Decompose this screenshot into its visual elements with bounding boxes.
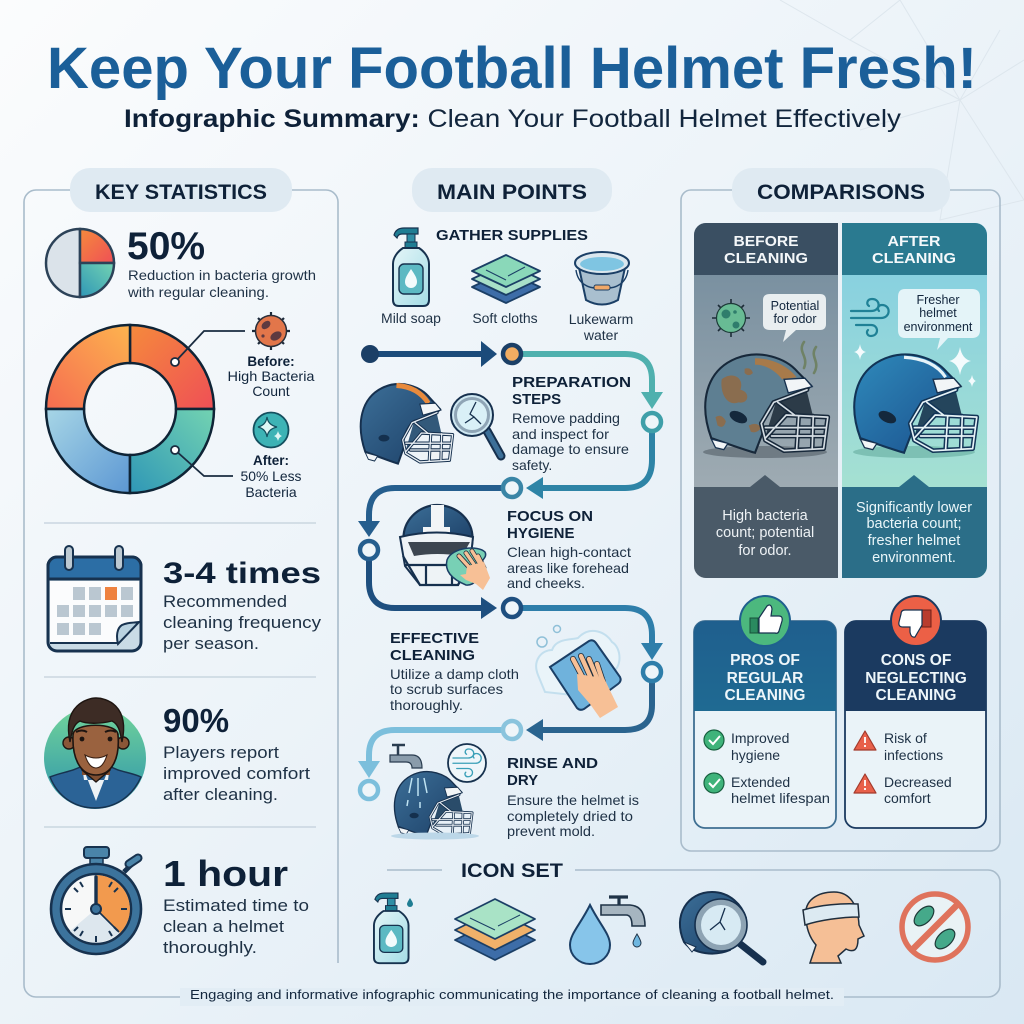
icon: clean helmet <box>853 354 977 458</box>
list: pros: Extended <box>731 774 790 790</box>
icon: soap bottle <box>374 893 413 963</box>
icon: helmet with magnifier <box>361 384 501 464</box>
speech bubble: fresher helmet environment <box>898 289 980 350</box>
stat: 1 hour: 1 hour <box>163 853 288 894</box>
text: preparation steps: safety. <box>512 457 552 473</box>
list: pros <box>704 730 830 806</box>
stat: 50%: 50% <box>127 225 205 268</box>
icon: odor waves <box>802 342 816 373</box>
icon: no bacteria <box>902 894 968 960</box>
text: effective cleaning: EFFECTIVE <box>390 630 479 647</box>
text: effective cleaning <box>390 630 519 713</box>
footer note <box>180 987 844 1006</box>
heading: pros: REGULAR <box>727 670 803 687</box>
title: Keep Your Football Helmet Fresh! <box>47 36 977 101</box>
icon: bacteria <box>252 312 290 350</box>
list: pros: hygiene <box>731 747 780 763</box>
heading: after cleaning: AFTER <box>888 233 941 250</box>
panel: before cleaning <box>694 223 838 578</box>
heading: cons: CONS OF <box>881 652 951 669</box>
list: cons: Decreased <box>884 774 952 790</box>
callout: before: Count <box>252 383 290 399</box>
icon: stopwatch <box>51 847 141 954</box>
heading: before cleaning <box>724 233 808 267</box>
text: rinse and dry: DRY <box>507 772 538 789</box>
list: cons: comfort <box>884 790 931 806</box>
callout: after: 50% Less <box>240 468 302 484</box>
donut chart <box>46 325 214 493</box>
footer note: Engaging and informative infographic communicating the importance of cleaning a football helmet. <box>190 987 834 1002</box>
heading: comparisons: COMPARISONS <box>757 180 925 204</box>
heading: icon set: ICON SET <box>461 861 563 882</box>
icon: fresh air <box>851 299 889 336</box>
text: before summary: count; potential <box>716 525 814 541</box>
callout: before: Before: <box>247 354 295 369</box>
list: cons <box>854 730 952 806</box>
heading: cons: CLEANING <box>876 687 956 704</box>
stat: 50%: Reduction in bacteria growth <box>128 267 316 283</box>
icon: sparkles <box>854 344 976 387</box>
text: before summary <box>716 508 814 559</box>
stat: 3-4 times: 3-4 times <box>163 557 321 590</box>
stat: 90%: 90% <box>163 702 229 739</box>
stat: 1 hour: clean a helmet <box>163 918 284 936</box>
speech bubble: potential for odor: Potential <box>771 299 819 313</box>
callout: after <box>240 453 302 500</box>
icon: germ <box>712 299 750 337</box>
text: after summary: fresher helmet <box>868 533 960 549</box>
text: focus on hygiene: FOCUS ON <box>507 508 593 525</box>
heading: after cleaning: CLEANING <box>872 250 956 267</box>
stat: 3-4 times: Recommended <box>163 593 287 611</box>
subtitle: Infographic Summary: Clean Your Football Helmet Effectively <box>124 105 902 133</box>
text: before summary: High bacteria <box>722 508 809 524</box>
text: after summary: Significantly lower <box>856 500 972 516</box>
list: cons: infections <box>884 747 943 763</box>
stat: 50% <box>127 225 316 300</box>
text: preparation steps: Remove padding <box>512 410 620 426</box>
icon: dirty helmet <box>703 354 828 458</box>
text: effective cleaning: thoroughly. <box>390 697 463 713</box>
callout: after: After: <box>253 453 289 468</box>
stat: 50%: with regular cleaning. <box>127 284 269 300</box>
label: lukewarm water: water <box>583 327 618 343</box>
list: pros: helmet lifespan <box>731 790 830 806</box>
icon: thumbs down <box>891 596 941 646</box>
text: effective cleaning: CLEANING <box>390 647 475 664</box>
flow nodes <box>360 345 661 799</box>
text: preparation steps: damage to ensure <box>512 441 629 457</box>
text: after summary: bacteria count; <box>866 516 962 532</box>
panel: after cleaning <box>842 223 987 578</box>
text: focus on hygiene: Clean high-contact <box>507 544 631 560</box>
text: effective cleaning: Utilize a damp cloth <box>390 666 519 682</box>
text: after summary: environment. <box>872 550 956 566</box>
icon: thumbs up <box>740 596 790 646</box>
icon: sparkle <box>254 412 288 448</box>
icon: helmet front with cloth and hand <box>400 505 490 590</box>
callout: before: High Bacteria <box>228 368 315 384</box>
text: preparation steps: PREPARATION <box>512 374 631 391</box>
icon: cloth stack <box>455 899 535 960</box>
heading: before cleaning: CLEANING <box>724 250 808 267</box>
icon: calendar <box>48 546 141 651</box>
stat: 90% <box>163 702 310 804</box>
icon: faucet, helmet and wind <box>390 744 486 840</box>
speech bubble: potential for odor: for odor <box>773 312 817 326</box>
text: preparation steps: STEPS <box>512 391 561 408</box>
callout leaders <box>171 331 245 476</box>
stat: 1 hour: thoroughly. <box>163 939 257 957</box>
stat: 3-4 times: per season. <box>163 635 259 653</box>
list: pros: Improved <box>731 730 789 746</box>
stat: 90%: improved comfort <box>163 765 310 783</box>
text: rinse and dry <box>507 755 639 839</box>
panel: pros of regular cleaning <box>694 596 836 828</box>
stat: 1 hour <box>163 853 309 957</box>
panel: key statistics <box>44 225 322 957</box>
heading: key statistics <box>70 168 292 212</box>
icon: small pie chart <box>46 229 114 297</box>
icon: helmet inspection <box>680 892 763 962</box>
text: after summary <box>856 500 972 566</box>
heading: pros <box>725 652 805 704</box>
flow arrowheads <box>358 341 663 778</box>
heading: cons <box>865 652 967 704</box>
heading: gather supplies: GATHER SUPPLIES <box>436 228 588 244</box>
panel: main points <box>358 228 663 840</box>
speech bubble: fresher helmet environment: environment <box>904 320 973 334</box>
label: lukewarm water: Lukewarm <box>569 311 633 327</box>
heading: main points: MAIN POINTS <box>437 180 587 204</box>
stat: 90%: Players report <box>163 744 279 762</box>
icon: cloth and hand with bubbles <box>536 626 621 718</box>
icon: soft cloths <box>472 255 540 303</box>
text: rinse and dry: RINSE AND <box>507 755 598 772</box>
text: preparation steps: and inspect for <box>512 426 609 442</box>
panel: cons of neglecting cleaning <box>845 596 986 828</box>
text: focus on hygiene: areas like forehead <box>507 560 629 576</box>
text: focus on hygiene <box>507 508 631 591</box>
text: preparation steps <box>512 374 631 473</box>
text: rinse and dry: Ensure the helmet is <box>507 792 639 808</box>
speech bubble: fresher helmet environment: Fresher <box>916 293 960 307</box>
label: soft cloths: Soft cloths <box>472 310 538 326</box>
icon: faucet <box>601 897 645 947</box>
text: effective cleaning: to scrub surfaces <box>390 681 503 697</box>
heading: pros: PROS OF <box>730 652 800 669</box>
list: cons: Risk of <box>884 730 927 746</box>
callout: before <box>228 354 315 399</box>
heading: cons: NEGLECTING <box>865 670 967 687</box>
text: before summary: for odor. <box>738 543 792 559</box>
text: rinse and dry: prevent mold. <box>507 823 595 839</box>
heading: comparisons <box>732 168 950 212</box>
flow path <box>369 354 652 765</box>
icon: mild soap <box>393 228 429 306</box>
stat: 1 hour: Estimated time to <box>163 897 309 915</box>
icon: player avatar <box>44 698 146 809</box>
text: rinse and dry: completely dried to <box>507 808 633 824</box>
icon: head with headband <box>803 892 864 963</box>
text: focus on hygiene: and cheeks. <box>507 575 585 591</box>
heading: key statistics: KEY STATISTICS <box>95 180 267 204</box>
stat: 3-4 times: cleaning frequency <box>163 614 322 632</box>
heading: before cleaning: BEFORE <box>734 233 798 250</box>
stat: 90%: after cleaning. <box>163 786 278 804</box>
speech bubble: potential for odor <box>763 294 826 342</box>
panel frames <box>24 190 1000 997</box>
icon: water drop <box>570 905 610 964</box>
text: focus on hygiene: HYGIENE <box>507 525 575 542</box>
panel: icon set <box>374 861 968 964</box>
icon: bucket <box>575 252 629 304</box>
stat: 3-4 times <box>163 557 322 653</box>
heading: pros: CLEANING <box>725 687 805 704</box>
heading: main points <box>412 168 612 212</box>
speech bubble: fresher helmet environment: helmet <box>919 306 957 320</box>
label: mild soap: Mild soap <box>381 310 441 326</box>
heading: after cleaning <box>872 233 956 267</box>
callout: after: Bacteria <box>245 484 297 500</box>
